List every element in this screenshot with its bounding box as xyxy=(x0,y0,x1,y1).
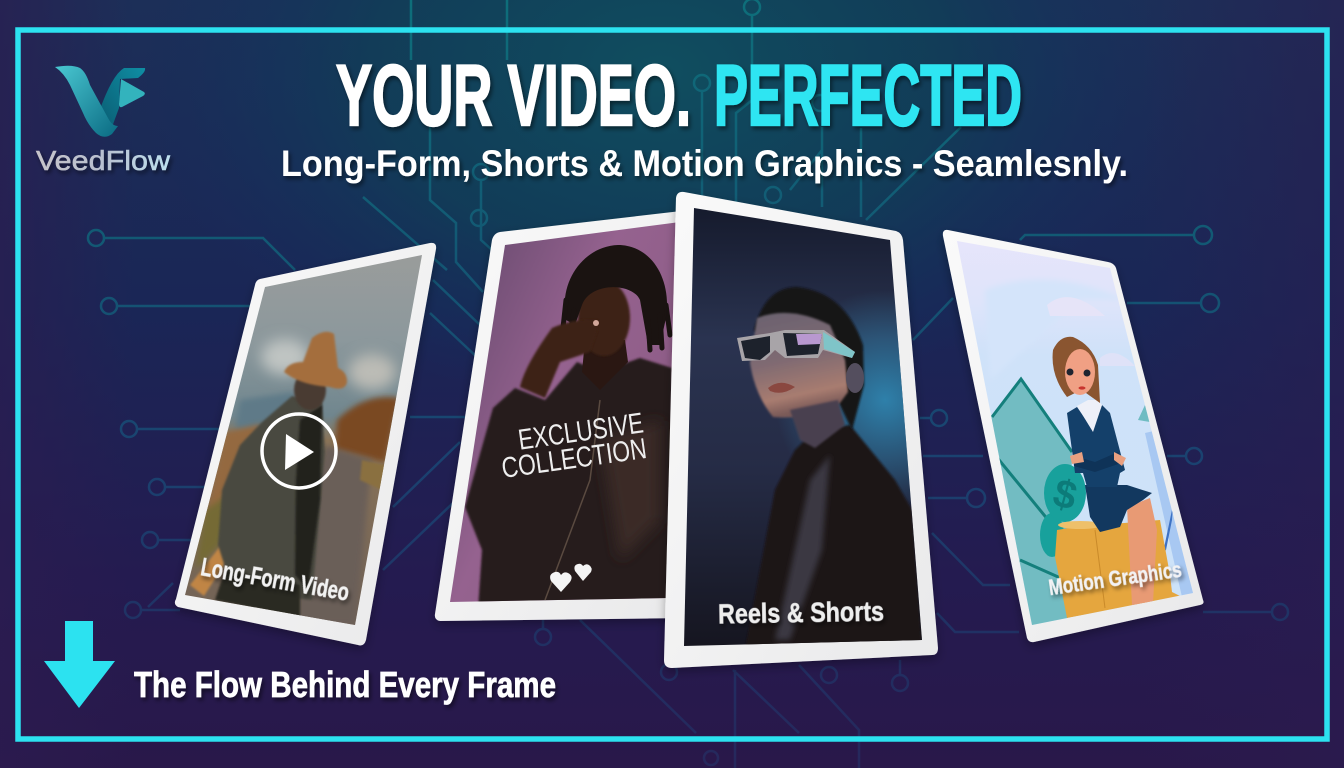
title: YOUR VIDEO. xyxy=(336,48,691,144)
label: EXCLUSIVE COLLECTION xyxy=(500,407,649,485)
coin xyxy=(1040,464,1086,557)
wordmark: VeedFlow xyxy=(36,145,170,176)
photo: man with dreadlocks xyxy=(450,222,676,602)
hands xyxy=(1070,452,1126,466)
face xyxy=(1065,349,1095,395)
icon: play button xyxy=(262,414,336,488)
crossed arms xyxy=(1074,452,1124,472)
legs xyxy=(1127,498,1157,605)
label: EXCLUSIVE COLLECTION: EXCLUSIVE xyxy=(516,407,645,457)
icon: V with play mark xyxy=(55,66,145,137)
title: PERFECTED xyxy=(714,48,1022,144)
logo: VeedFlow xyxy=(36,66,170,176)
boxes xyxy=(1055,520,1182,618)
panel: motion graphics card xyxy=(943,230,1204,642)
label: Motion Graphics: Motion Graphics xyxy=(1047,557,1183,600)
panel: long-form video card xyxy=(170,240,440,645)
icon: hearts xyxy=(550,564,592,592)
woman xyxy=(1053,337,1157,605)
label: Long-Form Video: Long-Form Video xyxy=(199,553,351,607)
neck and face xyxy=(582,340,628,390)
arrow: down xyxy=(44,621,115,708)
photo: man in hat on road xyxy=(185,255,422,625)
illustration: businesswoman on coins xyxy=(950,235,1200,635)
coin: $ xyxy=(1049,471,1081,519)
skirt xyxy=(1085,485,1152,532)
hair and head xyxy=(754,287,864,430)
money bill xyxy=(985,379,1072,630)
label: Reels & Shorts: Reels & Shorts xyxy=(718,596,884,629)
jacket xyxy=(465,358,672,610)
tagline: The Flow Behind Every Frame xyxy=(134,664,556,705)
panel: reels and shorts card xyxy=(664,192,938,668)
jacket xyxy=(1067,405,1125,487)
raised arm xyxy=(520,320,598,398)
icon: sunglasses xyxy=(737,330,855,361)
panel: exclusive collection card xyxy=(435,210,690,621)
subtitle: Long-Form, Shorts & Motion Graphics - Seamlesnly. xyxy=(281,143,1128,184)
photo: woman with sunglasses xyxy=(680,205,930,650)
arrow chart xyxy=(1145,430,1195,597)
hair xyxy=(1053,337,1100,403)
jacket xyxy=(745,425,922,650)
label: EXCLUSIVE COLLECTION: COLLECTION xyxy=(500,433,649,485)
person: man in coat xyxy=(215,332,347,618)
